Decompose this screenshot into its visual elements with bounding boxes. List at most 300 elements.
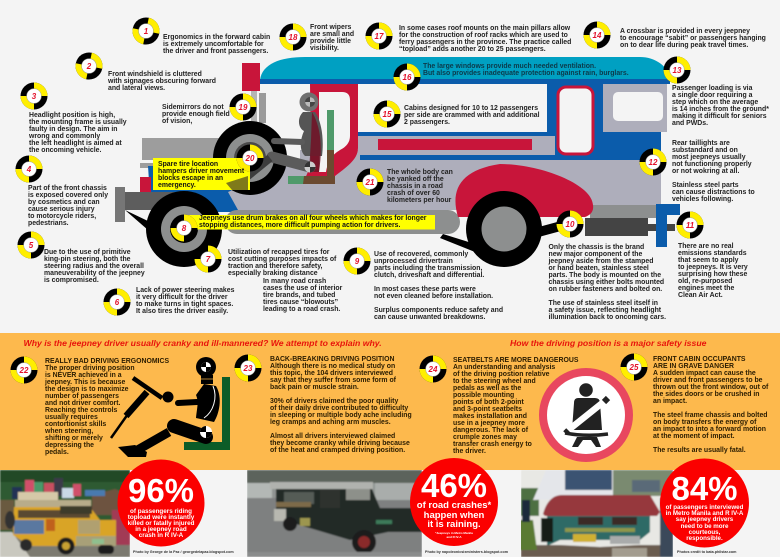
text 7b: road crash tires: tires cause “blowouts” — [263, 299, 338, 306]
text 4: front chassis: Part of the front chassis — [28, 184, 107, 192]
badge 12: 12 — [649, 158, 658, 167]
text 24: seatbelts: makes installation and — [453, 412, 527, 420]
text 4: front chassis: to motorcycle riders, — [28, 212, 96, 220]
text 17: roof mounts: “topload” adds another 20 to 25 passengers. — [399, 46, 546, 53]
stat: 96%: of passengers riding — [130, 508, 192, 514]
text 25: front cabin occupants: The results are usually fatal. — [653, 446, 746, 454]
badge 1: 1 — [144, 27, 149, 36]
badge 6: 6 — [115, 298, 120, 307]
badge 19: 19 — [239, 103, 248, 112]
rear wheel — [466, 191, 542, 267]
text 2: windshield — [108, 70, 216, 92]
text 1: cabin ergonomics: the driver and front passengers. — [163, 48, 268, 54]
jeepney hood — [140, 138, 222, 168]
badge 17 — [366, 22, 392, 50]
riders on roof — [12, 487, 22, 499]
text 23: back-breaking position: in sleeping or multiple body ache including — [270, 412, 412, 418]
text 5: king-pin steering: Due to the use of primitive — [44, 248, 131, 256]
badge 5: 5 — [29, 241, 34, 250]
text 11: emissions — [678, 242, 748, 298]
text 25: front cabin occupants: at the moment of impact. — [653, 432, 735, 440]
jeepney illustration — [115, 57, 680, 267]
rear door — [558, 87, 593, 154]
jeep body — [13, 507, 116, 546]
text 23: back-breaking position: back pain or muscle strain. — [270, 384, 359, 390]
badge 12 — [640, 148, 666, 176]
seat — [184, 377, 230, 450]
text 15: cabin capacity: Cabins designed for 10 to 12 passengers — [404, 104, 538, 112]
stat: 96%: crash in R IV-A — [139, 532, 183, 539]
text 23: back-breaking position: 30% of drivers claimed the poor quality — [270, 398, 398, 404]
text 25: front cabin occupants: A sudden impact can cause the — [653, 370, 756, 376]
lavender fill under the cab — [300, 150, 360, 200]
text 11: emissions: old, re-purposed — [678, 278, 732, 284]
driver dummy seated in cab — [238, 92, 323, 184]
badge 16 — [394, 64, 420, 90]
green seat — [288, 110, 335, 184]
text 12: taillights: most jeepneys usually — [672, 154, 746, 160]
badge 10 — [556, 210, 584, 238]
text 4: front chassis: by cosmetics and can — [28, 198, 100, 206]
side gray band with red stripe — [358, 136, 555, 155]
text 25: front cabin occupants: ARE IN GRAVE DANGER — [653, 362, 734, 370]
text 24: seatbelts: SEATBELTS ARE MORE DANGEROUS — [453, 356, 578, 364]
text 21: body yanked — [387, 168, 453, 204]
badge 22 — [10, 356, 38, 384]
text 18: wipers: visibility. — [310, 45, 339, 52]
text 19: side mirrors: provide enough field — [162, 111, 230, 118]
text 10: chassis: new major component of the — [548, 250, 642, 258]
badge 8: 8 — [182, 224, 187, 233]
front wheel — [146, 191, 222, 267]
text 22: bad ergonomics: shifting or merely — [45, 434, 103, 442]
text 20: spare tire: emergency. — [158, 182, 196, 188]
text 3: headlights: the oncoming vehicle. — [29, 146, 101, 154]
badge 14 — [584, 22, 610, 48]
stat: 96%: killed or fatally injured — [128, 520, 194, 527]
text 13: passenger loading: a single door requiring a — [672, 92, 752, 99]
badge 21 — [356, 168, 384, 196]
text 22: bad ergonomics: jeepney. This is because — [45, 378, 125, 386]
text 24: seatbelts: possible mounting — [453, 392, 514, 398]
badge 14: 14 — [593, 31, 602, 40]
text 14: crossbar — [620, 28, 766, 48]
stat: 46%: *Jeepneys in Metro Manila — [435, 531, 473, 535]
cabin window — [358, 84, 547, 132]
photo credit 3: Photos credit to bata.philstar.com — [677, 550, 736, 554]
text 20: spare tire: hampers driver movement — [158, 168, 244, 174]
text 14: crossbar: A crossbar is provided in every jeepney — [620, 28, 750, 34]
badge 8 — [170, 214, 198, 242]
text 5: king-pin steering: is compromised. — [44, 276, 99, 284]
text 22: bad ergonomics: REALLY BAD DRIVING ERGONOMICS — [45, 358, 169, 364]
text 22: bad ergonomics: when steering, — [45, 428, 93, 434]
text 12: taillights — [672, 140, 755, 202]
text 5: king-pin steering: king-pin steering, both the — [44, 256, 131, 262]
text 12: taillights: Rear taillights are — [672, 140, 730, 146]
text 7: recapped tires: especially braking distance — [228, 270, 318, 277]
stat: 96%: topload were instantly — [128, 514, 194, 521]
text 12: taillights: can cause distractions to — [672, 188, 755, 196]
text 21: body yanked: be yanked off the — [387, 176, 444, 183]
photo: crashed jeepney and bus — [520, 470, 673, 557]
head marker — [196, 357, 216, 377]
text 20: spare tire: Spare tire location — [158, 160, 218, 168]
text 11: emissions: emissions standards — [678, 250, 747, 256]
badge 7: 7 — [206, 255, 211, 264]
badge 24: 24 — [428, 365, 438, 374]
red roof — [543, 495, 660, 516]
torso and limbs — [196, 384, 220, 422]
text 25: front cabin occupants: driver and front passengers to be — [653, 376, 763, 384]
text 15: cabin capacity: 2 passengers. — [404, 118, 450, 126]
badge 23 — [234, 354, 262, 382]
text 17: roof mounts: ferry passengers in the province. The practice called — [399, 39, 571, 46]
jeepney body blue upper — [358, 82, 661, 160]
text 7: recapped tires: traction and therefore safety, — [228, 263, 322, 270]
text 17: roof mounts — [399, 24, 571, 53]
text 10: chassis: on rubber fasteners and bolted on. — [548, 286, 662, 292]
text 24: seatbelts: crumple zones may — [453, 434, 517, 440]
text 21: body yanked: The whole body can — [387, 169, 453, 176]
badge 16: 16 — [403, 73, 412, 82]
text 13: passenger loading: step which on the average — [672, 99, 758, 106]
text 24: seatbelts: An understanding and analysis — [453, 364, 555, 370]
text 24: seatbelts: transfer crash energy to — [453, 440, 532, 448]
stat: 46%: it is raining. — [427, 519, 481, 530]
mirror and posts — [242, 63, 266, 136]
text 21: body yanked: chassis in a road — [387, 183, 443, 190]
text 19: side mirrors: of vision, — [162, 118, 192, 125]
badge 25 — [620, 354, 648, 380]
badge 13: 13 — [673, 66, 682, 75]
badge 5 — [18, 232, 44, 258]
text 2: windshield: and lateral views. — [108, 84, 165, 92]
badge 10: 10 — [566, 220, 575, 229]
text 15: cabin capacity: per side are crammed with and additional — [404, 112, 540, 118]
text 17: roof mounts: In some cases roof mounts on the main pillars allow — [399, 25, 570, 32]
text 9: drivetrain: In most cases these parts were — [374, 286, 476, 292]
text 23: back-breaking position — [270, 356, 412, 454]
badge 20: 20 — [245, 154, 255, 163]
text 25: front cabin occupants — [653, 356, 768, 454]
text 25: front cabin occupants: thrown out the front window, out of — [653, 384, 768, 390]
text 22: bad ergonomics: number of passengers — [45, 392, 119, 400]
stat: 84%: of passengers interviewed — [666, 504, 743, 511]
text 3: headlights: the left headlight is aimed at — [29, 140, 122, 146]
text 4: front chassis: pedestrians. — [28, 220, 69, 226]
lower chassis band — [225, 205, 656, 234]
text 7b: road crash tires: In many road crash — [263, 278, 326, 285]
badge 22: 22 — [19, 366, 29, 375]
text 5: king-pin steering: steering radius and the overall — [44, 262, 144, 270]
jeep roof — [18, 492, 58, 500]
text 1: cabin ergonomics: is extremely uncomfortable for — [163, 40, 264, 48]
text 14: crossbar: on to dear life during peak travel times. — [620, 42, 748, 48]
stat: 84% — [666, 470, 744, 542]
text 7: recapped tires: cost cutting purposes impacts of — [228, 256, 336, 263]
jeep — [270, 482, 373, 489]
text 6: power steering — [136, 286, 234, 315]
photo credit 1: Photo by George de la Paz / georgedelapaz.blogspot.com — [133, 550, 234, 554]
badge 2 — [73, 50, 105, 82]
text 10: chassis: The use of stainless steel itself in — [548, 300, 658, 306]
text 25: front cabin occupants: the sides doors or be crushed in — [653, 390, 759, 398]
spare tire — [213, 121, 287, 195]
text 20: spare tire — [158, 160, 244, 188]
text 10: chassis: a safety issue, reflecting headlight — [548, 306, 661, 314]
text 11: emissions: to jeepneys. It is very — [678, 264, 748, 270]
blue rear bumper — [656, 204, 680, 247]
text 21: body yanked: kilometers per hour — [387, 197, 451, 204]
text 23: back-breaking position: this topic, the 104 drivers interviewed — [270, 370, 393, 376]
rear gray panel and window — [603, 84, 667, 132]
text 7b: road crash tires: leading to a road crash. — [263, 306, 340, 313]
jeepney roof — [260, 57, 672, 84]
heading: safety issue: How the driving position is a major safety issue — [510, 338, 706, 348]
callout circle: 96% — [118, 460, 204, 546]
text 11: emissions: engines meet the — [678, 284, 734, 292]
badge 4: 4 — [26, 165, 32, 174]
badge 17: 17 — [375, 32, 384, 41]
red front door frame — [303, 84, 358, 183]
text 25: front cabin occupants: on body transfers the energy of — [653, 418, 756, 426]
text 24: seatbelts: and 3-point seatbelts — [453, 406, 522, 412]
photo credit 2: Photo by napoleonicsixministers.blogspot.com — [425, 550, 508, 554]
text 12: taillights: vehicles following. — [672, 196, 733, 202]
text 21: body yanked: crash of over 60 — [387, 190, 440, 197]
badge 9: 9 — [355, 257, 360, 266]
text 11: emissions: that seem to apply — [678, 256, 738, 264]
text 20: spare tire: blocks escape in an — [158, 174, 223, 182]
text 3: headlights: wrong and commonly — [29, 132, 100, 140]
text 22: bad ergonomics: The proper driving position — [45, 364, 135, 372]
stat: 46%: and R IV-A — [446, 535, 462, 539]
stat: 46%: 46% — [421, 467, 487, 504]
text 7b: road crash tires — [263, 278, 342, 313]
text 24: seatbelts: points of both 2-point — [453, 398, 524, 406]
text 24: seatbelts: of the driving postion relative — [453, 370, 549, 378]
text 9: drivetrain: clutch, driveshaft and differential. — [374, 272, 484, 278]
stat: 46%: of road crashes* — [417, 500, 491, 511]
badge 2: 2 — [86, 62, 92, 71]
text 24: seatbelts — [453, 356, 578, 454]
badge 18 — [280, 24, 306, 50]
stat: 96%: in a jeepney road — [135, 526, 187, 533]
text 7b: road crash tires: tire brands, and tubed — [263, 292, 335, 299]
teal body — [547, 516, 650, 546]
text 10: chassis: chassis using either bolts mounted — [548, 278, 664, 286]
text 12: taillights: Stainless steel parts — [672, 182, 739, 188]
badge 13 — [664, 56, 690, 84]
text 2: windshield: Front windshield is cluttered — [108, 70, 202, 78]
text 22: bad ergonomics: is NEVER achieved in a — [45, 372, 122, 378]
text 9: drivetrain: unprocessed drivertrain — [374, 258, 453, 264]
text 13: passenger loading: making it difficult for seniors — [672, 113, 767, 120]
text 22: bad ergonomics — [44, 358, 169, 456]
stat: 84%: 84% — [671, 470, 738, 507]
badge 18: 18 — [289, 33, 298, 42]
photo: overloaded jeepney — [0, 470, 130, 557]
text 23: back-breaking position: they become cranky while driving because — [270, 440, 410, 446]
text 25: front cabin occupants: an impact. — [653, 398, 687, 404]
badge 24 — [420, 356, 446, 382]
text 24: seatbelts: use in a jeepney more — [453, 420, 525, 426]
text 7b: road crash tires: cases the use of interior — [263, 285, 342, 292]
text 16: windows — [423, 62, 629, 76]
badge 9 — [344, 248, 370, 274]
cab opening — [319, 92, 350, 172]
callout circle: 84% — [660, 458, 749, 548]
text 18: wipers: provide little — [310, 38, 351, 45]
badge 3: 3 — [32, 92, 37, 101]
rear red fender — [455, 164, 593, 217]
icon: seatbelt sign — [539, 368, 633, 462]
heading: why drivers are cranky: Why is the jeepney driver usually cranky and ill-mannered? We attempt to explain why. — [24, 338, 382, 348]
callout circle: 46% — [410, 458, 498, 546]
text 8: drum brakes: stopping distances, more difficult pumping action for drivers. — [199, 222, 400, 229]
dummy: seated driver diagram — [111, 357, 230, 457]
text 9: drivetrain: Use of recovered, commonly — [374, 250, 468, 258]
text 9: drivetrain: can cause unwanted breakdowns. — [374, 314, 485, 320]
text 13: passenger loading: is 14 inches from the ground* — [672, 106, 769, 113]
badge 25: 25 — [629, 363, 639, 372]
text 10: chassis: parts. The body is mounted on the — [548, 272, 661, 278]
text 24: seatbelts: dangerous. The lack of — [453, 426, 528, 434]
text 23: back-breaking position: say that they suffer from some form of — [270, 376, 396, 384]
text 10: chassis: or hand beaten, stainless steel — [548, 264, 649, 272]
text 10: chassis: illumination back to oncoming cars. — [548, 314, 666, 320]
text 22: bad ergonomics: the design is to maximize — [45, 386, 128, 392]
text 23: back-breaking position: of the heat and cramped driving position. — [270, 446, 405, 454]
hip marker — [200, 426, 212, 438]
text 13: passenger loading: and PWDs. — [672, 120, 708, 127]
text 8: drum brakes — [199, 214, 426, 229]
badge 11 — [676, 212, 704, 238]
text 22: bad ergonomics: and not driver comfort. — [45, 400, 120, 406]
text 13: passenger loading — [672, 84, 769, 127]
photo: jeepney in the rain — [247, 470, 422, 557]
text 8: drum brakes: Jeepneys use drum brakes on all four wheels which makes for longer — [199, 215, 426, 222]
front blue cowl and red lamp — [140, 166, 240, 212]
text 22: bad ergonomics: usually requires — [45, 414, 98, 420]
stat: 84%: in Metro Manila and R IV-A — [666, 510, 743, 517]
badge 1 — [130, 15, 162, 47]
text 14: crossbar: to encourage “sabit” or passengers hanging — [620, 34, 766, 42]
text 5: king-pin steering: maneuverability of the jeepney — [44, 270, 145, 276]
text 18: wipers: are small and — [310, 31, 354, 38]
text 25: front cabin occupants: FRONT CABIN OCCUPANTS — [653, 356, 746, 362]
text 3: headlights — [29, 112, 127, 154]
text 3: headlights: Headlight position is high, — [29, 112, 115, 118]
text 3: headlights: faulty in design. The aim in — [29, 126, 117, 132]
stat: 46%: happen when — [424, 510, 484, 521]
badge 19 — [230, 94, 256, 120]
badge 15 — [374, 100, 400, 128]
text 16: windows: The large windows provide much needed ventilation. — [423, 62, 596, 70]
badge 6 — [104, 288, 130, 316]
text 9: drivetrain: Surplus components reduce safety and — [374, 306, 503, 314]
stat: 84%: need to be more — [681, 523, 728, 530]
text 11: emissions: surprising how these — [678, 270, 747, 278]
text 2: windshield: with signages obscuring forward — [108, 78, 216, 84]
stat: 84%: say jeepney drivers — [676, 516, 733, 523]
text 23: back-breaking position: Almost all drivers interviewed claimed — [270, 432, 395, 440]
text 6: power steering: Lack of power steering makes — [136, 287, 234, 294]
text 9: drivetrain: not even cleaned before installation. — [374, 292, 493, 300]
text 9: drivetrain — [374, 250, 503, 320]
text 10: chassis — [548, 244, 666, 320]
text 18: wipers: Front wipers — [310, 24, 351, 31]
callout strip: drum brakes — [185, 215, 435, 230]
text 1: cabin ergonomics — [163, 34, 270, 54]
text 19: side mirrors — [162, 104, 230, 125]
text 23: back-breaking position: Although there is no medical study on — [270, 362, 395, 370]
text 13: passenger loading: Passenger loading is via — [672, 85, 752, 92]
stat: 84%: responsible. — [686, 535, 723, 542]
text 10: chassis: jeepney aside from the stamped — [548, 258, 653, 264]
text 11: emissions: Clean Air Act. — [678, 292, 723, 298]
ground and debris — [521, 545, 673, 557]
text 22: bad ergonomics: pedals. — [45, 448, 69, 456]
badges — [10, 15, 704, 384]
text 22: bad ergonomics: contortionist skills — [45, 420, 106, 428]
text 5: king-pin steering — [44, 248, 145, 284]
text 25: front cabin occupants: The steel frame chassis and bolted — [653, 412, 768, 418]
text 9: drivetrain: parts including the transmission, — [374, 264, 482, 272]
text 22: bad ergonomics: Reaching the controls — [45, 406, 117, 414]
text 15: cabin capacity — [404, 104, 540, 126]
jeepney body lower panel — [228, 160, 661, 210]
text 22: bad ergonomics: depressing the — [45, 442, 94, 448]
stat: 96%: 96% — [128, 472, 194, 509]
text 17: roof mounts: for the construction of roof racks which are used to — [399, 32, 568, 39]
text 25: front cabin occupants: an impact to into a forward motion — [653, 426, 766, 432]
badge 21: 21 — [365, 178, 375, 187]
badge 3 — [20, 82, 48, 110]
text 23: back-breaking position: of their daily drive contributed to difficulty — [270, 404, 408, 412]
text 4: front chassis: cause serious injury — [28, 206, 95, 212]
badge 7 — [194, 246, 222, 272]
badge 23: 23 — [243, 364, 253, 373]
text 7: recapped tires — [228, 248, 336, 277]
text 24: seatbelts: to the steering wheel and — [453, 378, 536, 384]
panel: orange explanation band — [0, 333, 780, 470]
text 12: taillights: substandard and on — [672, 146, 738, 154]
badge 20 — [236, 144, 264, 172]
text 12: taillights: or not wokring at all. — [672, 168, 739, 174]
text 23: back-breaking position: leg cramps and aching arm muscles. — [270, 418, 391, 426]
badge 4 — [16, 156, 42, 182]
stat: 46% — [417, 467, 492, 539]
text 6: power steering: It also tires the driver easily. — [136, 308, 228, 315]
text 16: windows: But also provides inadequate protection against rain, burglars. — [423, 70, 629, 76]
text 24: seatbelts: the driver. — [453, 448, 486, 454]
text 24: seatbelts: pedals as well as the — [453, 384, 521, 392]
front chassis arm — [115, 187, 175, 230]
text 6: power steering: to make turns in tight spaces. — [136, 301, 233, 308]
stat: 84%: courteous, — [689, 529, 720, 536]
badge 15: 15 — [383, 110, 392, 119]
text 7: recapped tires: Utilization of recapped tires for — [228, 249, 329, 256]
text 3: headlights: the mounting frame is usually — [29, 118, 127, 126]
text 10: chassis: Only the chassis is the brand — [548, 244, 644, 250]
text 18: wipers — [310, 24, 354, 52]
text 1: cabin ergonomics: Ergonomics in the forward cabin — [163, 34, 270, 40]
text 12: taillights: not functioning properly — [672, 160, 752, 168]
text 4: front chassis: is exposed covered only — [28, 192, 108, 198]
text 23: back-breaking position: BACK-BREAKING DRIVING POSITION — [270, 356, 394, 362]
